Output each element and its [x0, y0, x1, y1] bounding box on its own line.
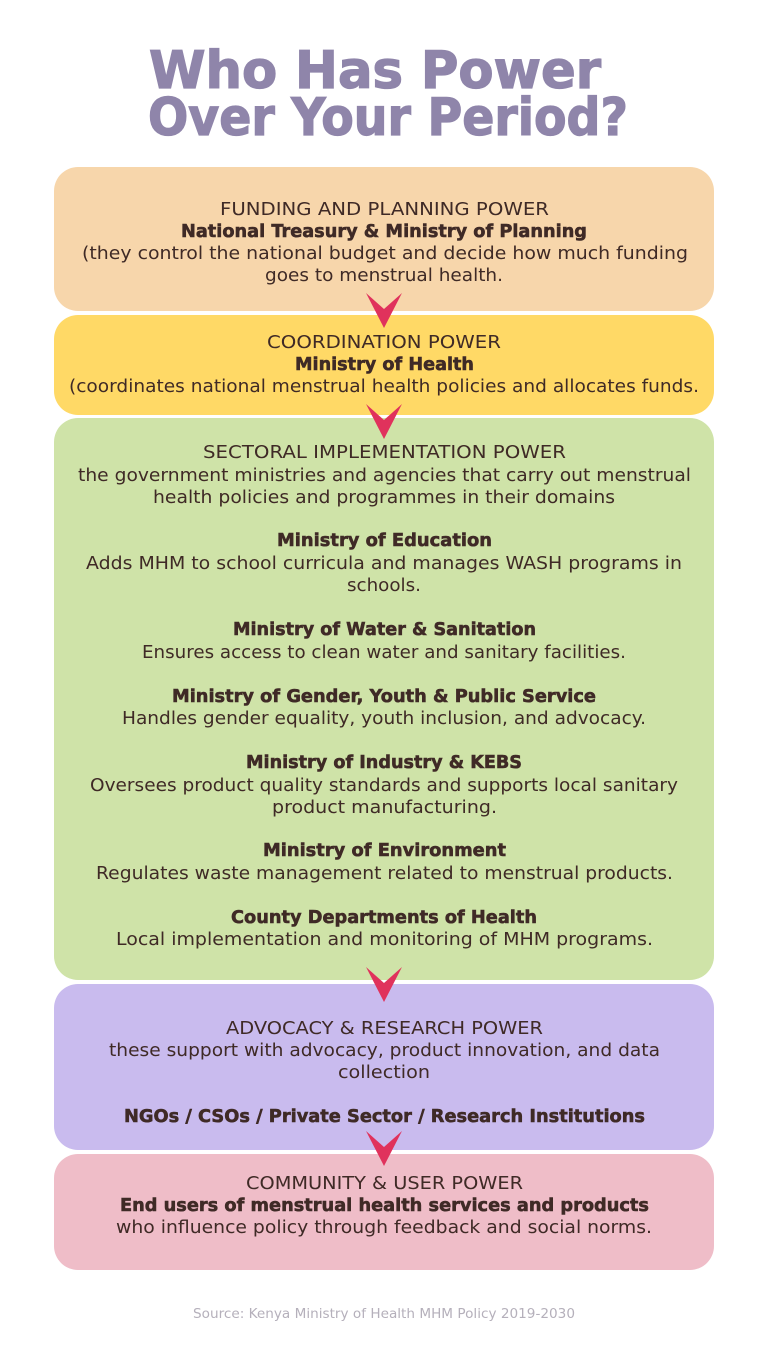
panel: community and user power: End users of menstrual health services and products — [120, 1196, 649, 1216]
panel: coordination power: COORDINATION POWER — [267, 333, 501, 353]
panel: advocacy and research power: NGOs / CSOs / Private Sector / Research Institutions — [124, 1107, 645, 1127]
ministry of industry and KEBS: Oversees product quality standards and supports local sanitary — [90, 776, 678, 796]
panel: advocacy and research power — [54, 984, 714, 1150]
sectoral heading and intro — [78, 443, 691, 508]
panel: community and user power — [54, 1154, 714, 1270]
arrow: coordination to sectoral — [366, 404, 402, 439]
ministry of education — [86, 531, 682, 596]
panel: funding and planning power: National Treasury & Ministry of Planning — [181, 222, 587, 242]
ministry of water and sanitation — [142, 620, 626, 663]
panel: sectoral implementation power — [54, 418, 714, 980]
panel: community and user power: who influence policy through feedback and social norms. — [116, 1218, 652, 1238]
ministry of gender, youth and public service: Handles gender equality, youth inclusion, and advocacy. — [122, 709, 646, 729]
county departments of health — [116, 908, 653, 950]
panel: advocacy and research power: ADVOCACY & RESEARCH POWER — [226, 1019, 543, 1039]
title — [148, 41, 628, 148]
ministry of water and sanitation: Ministry of Water & Sanitation — [233, 620, 536, 640]
panel: coordination power: Ministry of Health — [295, 355, 474, 375]
panel: funding and planning power: (they control the national budget and decide how much funding — [82, 244, 688, 264]
panel: advocacy and research power: these support with advocacy, product innovation, and data — [109, 1041, 660, 1061]
ministry of industry and KEBS — [90, 753, 678, 818]
ministry of environment: Regulates waste management related to menstrual products. — [96, 864, 673, 884]
ministry of environment — [96, 841, 673, 884]
ministry of education: Adds MHM to school curricula and manages WASH programs in — [86, 554, 682, 574]
panel: community and user power: COMMUNITY & USER POWER — [246, 1174, 523, 1194]
ministry of industry and KEBS: product manufacturing. — [272, 798, 497, 818]
county departments of health: Local implementation and monitoring of MHM programs. — [116, 930, 653, 950]
ministry of education: schools. — [347, 576, 421, 596]
panel: funding and planning power: FUNDING AND PLANNING POWER — [220, 200, 549, 220]
ministry of industry and KEBS: Ministry of Industry & KEBS — [246, 753, 522, 773]
arrow: advocacy to community — [366, 1131, 402, 1166]
source note: Source: Kenya Ministry of Health MHM Policy 2019-2030 — [193, 1306, 575, 1322]
ministry of gender, youth and public service — [122, 687, 646, 729]
panel: funding and planning power — [54, 167, 714, 311]
ministry of environment: Ministry of Environment — [263, 841, 506, 861]
panel: advocacy and research power: collection — [338, 1063, 430, 1083]
panel: funding and planning power: goes to menstrual health. — [265, 266, 503, 286]
title: Over Your Period? — [148, 88, 628, 148]
sectoral heading and intro: the government ministries and agencies that carry out menstrual — [78, 466, 691, 486]
ministry of gender, youth and public service: Ministry of Gender, Youth & Public Service — [172, 687, 596, 707]
panel: coordination power: (coordinates national menstrual health policies and allocates funds. — [69, 377, 699, 397]
county departments of health: County Departments of Health — [231, 908, 537, 928]
sectoral heading and intro: health policies and programmes in their domains — [153, 488, 615, 508]
title: Who Has Power — [149, 41, 601, 101]
arrow: sectoral to advocacy — [366, 967, 402, 1002]
ministry of water and sanitation: Ensures access to clean water and sanitary facilities. — [142, 643, 626, 663]
sectoral heading and intro: SECTORAL IMPLEMENTATION POWER — [203, 443, 566, 463]
arrow: funding to coordination — [366, 293, 402, 328]
panel: coordination power — [54, 315, 714, 415]
ministry of education: Ministry of Education — [277, 531, 492, 551]
